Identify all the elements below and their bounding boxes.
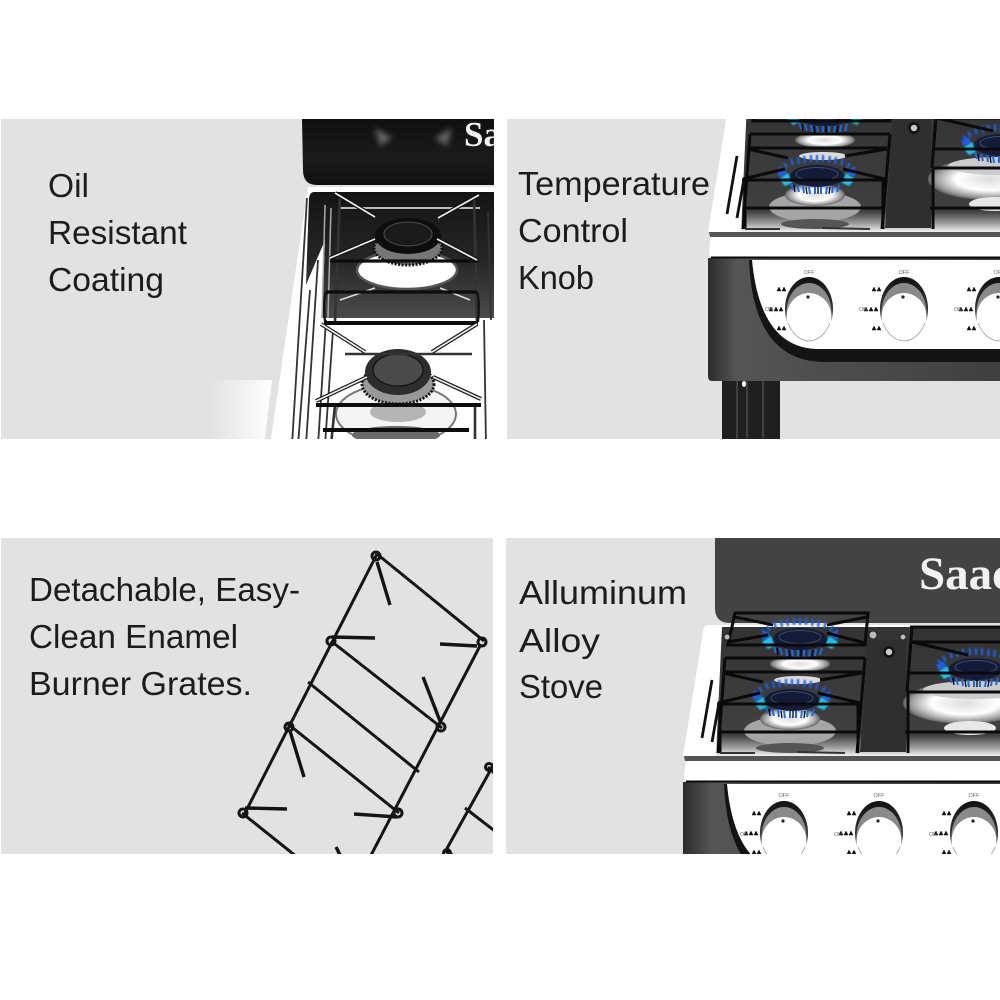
panel: aluminum alloy stove bbox=[506, 538, 1000, 854]
stove front with knobs photo bbox=[708, 119, 1000, 439]
stove front with knobs photo: OFF bbox=[898, 270, 910, 276]
panel: temperature control knob bbox=[507, 119, 1000, 439]
heading: detachable burner grates: Burner Grates. bbox=[29, 665, 252, 702]
heading: temperature control knob: Knob bbox=[518, 259, 594, 296]
stove with burners photo: ON bbox=[740, 832, 748, 838]
heading: detachable burner grates: Clean Enamel bbox=[29, 618, 238, 655]
heading: temperature control knob: Temperature bbox=[518, 165, 710, 202]
heading: oil resistant coating: Oil bbox=[48, 167, 89, 204]
stove with burners photo: OFF bbox=[778, 793, 790, 799]
stove front with knobs photo: ON bbox=[954, 307, 962, 313]
heading: detachable burner grates: Detachable, Easy- bbox=[29, 571, 300, 608]
stove with burners photo bbox=[683, 538, 1000, 854]
stove front with knobs photo: ON bbox=[765, 307, 773, 313]
stove front with knobs photo: ON bbox=[859, 307, 867, 313]
panel: oil resistant coating bbox=[1, 115, 501, 445]
stove close-up photo bbox=[228, 119, 494, 439]
heading: oil resistant coating: Coating bbox=[48, 261, 164, 298]
stove with burners photo: OFF bbox=[874, 793, 885, 799]
heading: aluminum alloy stove: Alloy bbox=[519, 622, 601, 659]
panel: detachable burner grates bbox=[1, 538, 500, 862]
heading: temperature control knob: Control bbox=[518, 212, 628, 249]
stove with burners photo: ON bbox=[834, 832, 842, 838]
burner grate illustration bbox=[239, 552, 500, 862]
heading: aluminum alloy stove: Stove bbox=[519, 668, 603, 705]
heading: oil resistant coating: Resistant bbox=[48, 214, 187, 251]
stove with burners photo: ON bbox=[929, 832, 937, 838]
stove with burners photo: OFF bbox=[968, 793, 980, 799]
stove front with knobs photo: OFF bbox=[804, 270, 815, 276]
heading: aluminum alloy stove: Alluminum bbox=[519, 574, 687, 611]
stove close-up photo: Sa bbox=[464, 115, 501, 154]
